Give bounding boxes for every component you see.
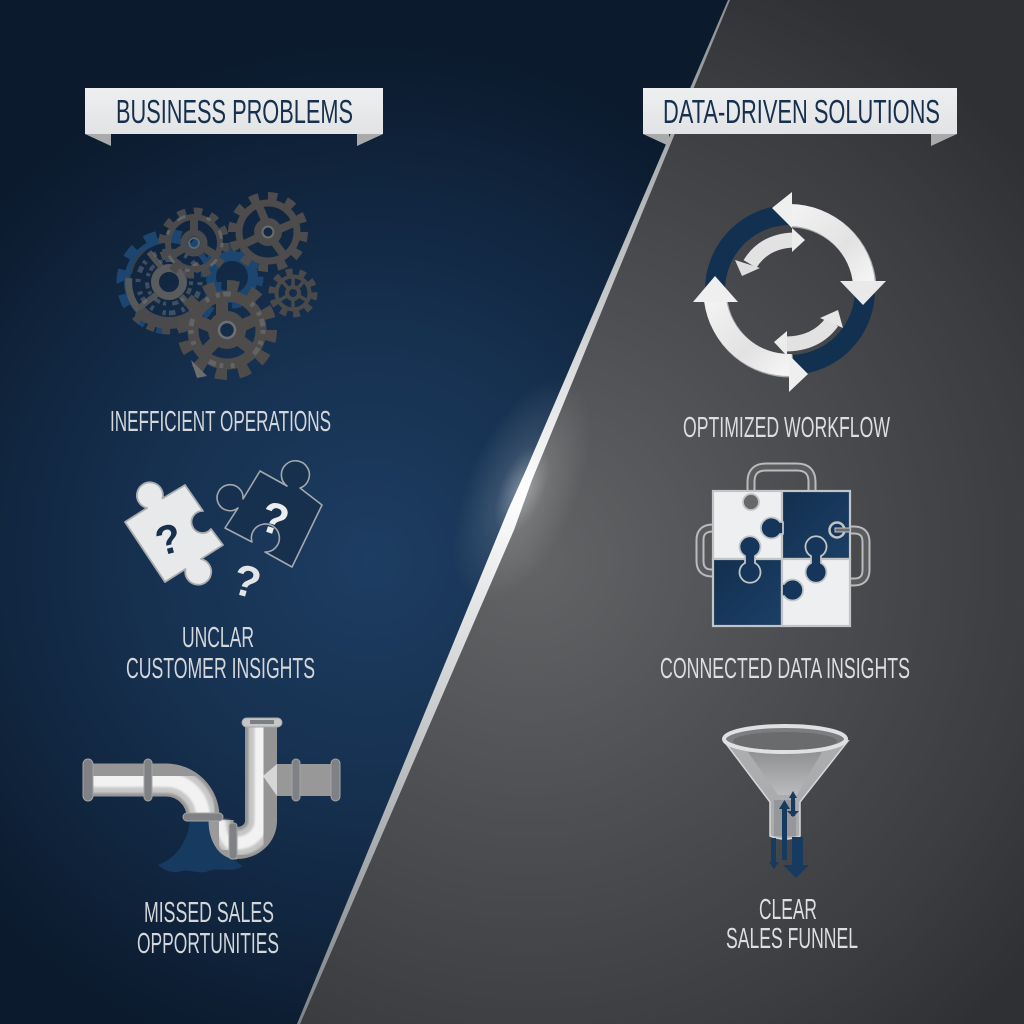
icon: rusty gears (121, 197, 314, 378)
outlined dark puzzle piece (217, 461, 322, 567)
banner: business problems heading (85, 88, 383, 146)
diagonal divider with glow (297, 0, 730, 1024)
gear: top center (163, 212, 225, 274)
puzzle quadrants (713, 491, 850, 626)
gear: left corroded (129, 250, 200, 330)
gear: top right (233, 197, 303, 267)
inner arrow: top left (735, 228, 805, 276)
icon: leaking pipe (83, 718, 340, 872)
gear: blue behind center (205, 250, 259, 304)
label: clear sales funnel (726, 894, 858, 955)
label: unclear customer insights (126, 622, 315, 685)
label: inefficient operations: INEFFICIENT OPERATIONS (110, 406, 331, 438)
arrow: top to right (772, 192, 886, 305)
banner: business problems heading: BUSINESS PROBLEMS (116, 93, 353, 130)
arrow: left to bottom (693, 276, 808, 392)
funnel arrows (769, 791, 809, 878)
puzzle knobs (740, 494, 850, 600)
pipe: right branch (262, 764, 333, 796)
water leak (158, 820, 243, 872)
white puzzle piece (125, 482, 223, 585)
icon: connected puzzle (700, 467, 866, 626)
label: missed sales opportunities: MISSED SALES (144, 897, 274, 929)
pipe: U bend left stub (221, 820, 237, 847)
gear: bottom large (183, 286, 271, 378)
icon: clear sales funnel (724, 726, 848, 878)
funnel neck shade (774, 800, 796, 836)
connector: top handle (751, 467, 812, 500)
icon: circular workflow arrows (693, 192, 886, 392)
label: clear sales funnel: CLEAR (759, 894, 817, 926)
label: missed sales opportunities: OPPORTUNITIES (137, 928, 279, 960)
pipe: vertical J (237, 724, 277, 843)
gear: blue behind left (121, 234, 217, 330)
label: optimized workflow: OPTIMIZED WORKFLOW (683, 412, 890, 444)
connector: right handle (850, 530, 866, 582)
navy ring (715, 215, 865, 365)
funnel body (724, 741, 848, 839)
panel: data-driven solutions background (298, 0, 1024, 1024)
pipe flanges (83, 718, 340, 859)
inner arrow: bottom right (774, 310, 843, 356)
funnel rim (724, 726, 846, 752)
connector: left handle (700, 528, 724, 573)
label: clear sales funnel: SALES FUNNEL (726, 923, 858, 955)
label: unclear customer insights: UNCLAR (182, 622, 254, 654)
pipe: left elbow (90, 780, 203, 817)
funnel inner cone (748, 752, 822, 795)
gear: small right (272, 272, 314, 314)
banner: data-driven solutions heading (643, 88, 957, 146)
icon: scattered puzzle pieces with question marks (125, 461, 322, 609)
outlined dark puzzle piece: ? (254, 492, 295, 547)
loose question mark: ? (227, 555, 266, 609)
label: unclear customer insights: CUSTOMER INSIGHTS (126, 653, 315, 685)
panel: business problems background (0, 0, 728, 1024)
white puzzle piece: ? (150, 514, 186, 565)
label: missed sales opportunities (137, 897, 279, 960)
